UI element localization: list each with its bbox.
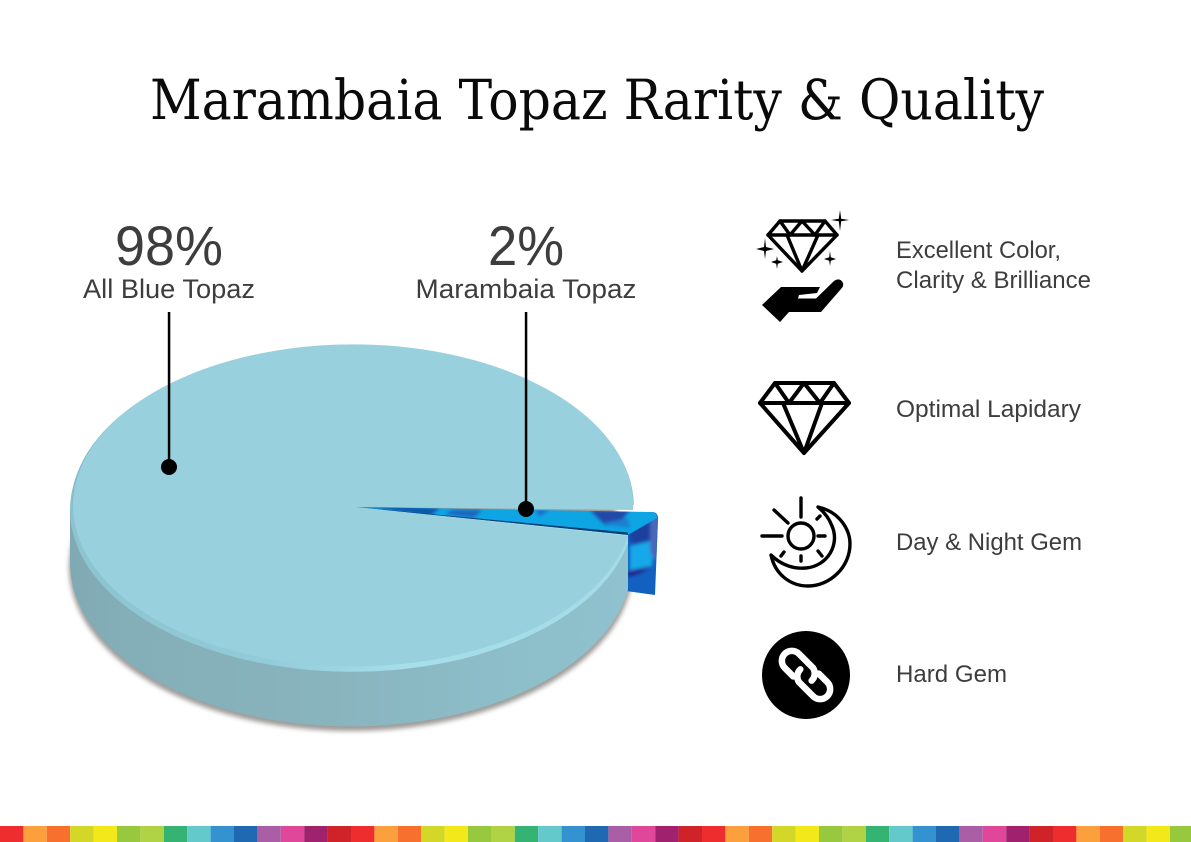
callout: 98% All Blue Topaz: 98% <box>115 214 223 277</box>
callout: 2% Marambaia Topaz: 2% <box>488 214 564 277</box>
top surface: 98% All Blue Topaz <box>73 344 633 666</box>
callout: 98% All Blue Topaz: All Blue Topaz <box>83 274 255 304</box>
callout: 2% Marambaia Topaz <box>416 214 636 517</box>
text: Day & Night Gem: Day & Night Gem <box>896 529 1082 556</box>
gem side of 2% slice <box>628 512 658 595</box>
callout: 2% Marambaia Topaz: Marambaia Topaz <box>416 274 636 304</box>
text: Optimal Lapidary: Optimal Lapidary <box>896 396 1081 423</box>
icon: chain link in circle <box>762 631 850 719</box>
icon: diamond <box>760 383 849 453</box>
text: Hard Gem: Hard Gem <box>896 661 1007 688</box>
text: Excellent Color, Clarity & Brilliance <box>896 237 1091 294</box>
callout: 98% All Blue Topaz <box>83 214 255 475</box>
text: Excellent Color, Clarity & Brilliance: Clarity & Brilliance <box>896 267 1091 294</box>
title: Marambaia Topaz Rarity & Quality <box>150 68 1044 132</box>
pie rim highlight <box>70 348 628 672</box>
pie chart <box>69 344 660 731</box>
rainbow colour strip <box>0 826 1191 842</box>
icon: sparkling diamond and hand <box>756 210 849 322</box>
pie shadow <box>69 403 633 731</box>
text: Excellent Color, Clarity & Brilliance: Excellent Color, <box>896 237 1061 264</box>
pie side wall <box>70 510 628 726</box>
icon: sun and moon <box>762 498 850 586</box>
2% Marambaia slice <box>356 505 657 535</box>
